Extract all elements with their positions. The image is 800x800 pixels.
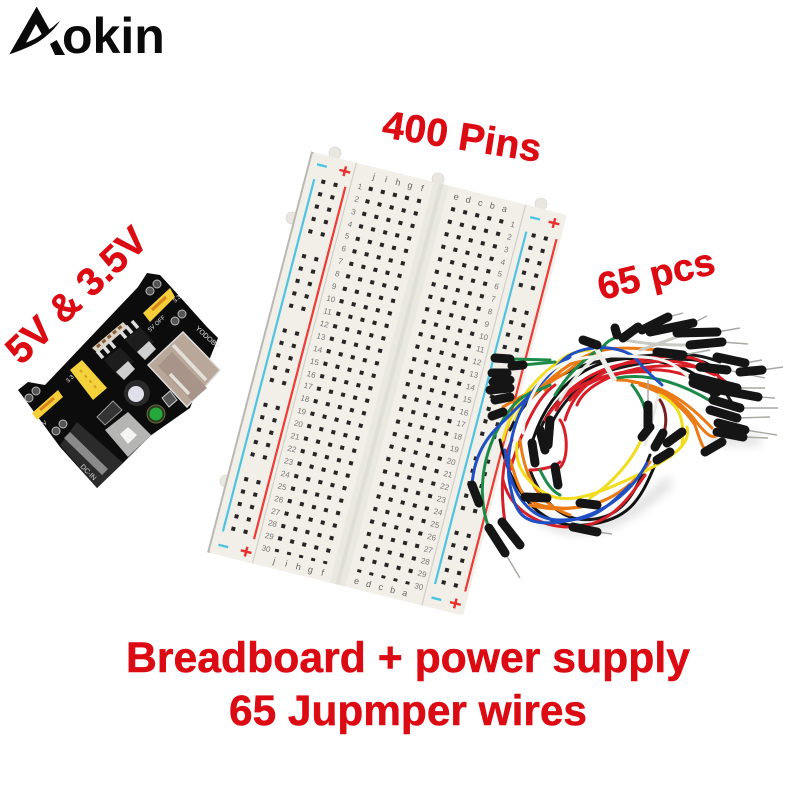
row numbers right: 4	[500, 257, 507, 267]
row numbers right: 29	[417, 569, 428, 580]
row numbers right: 9	[484, 319, 491, 329]
row numbers left: 15	[309, 357, 320, 368]
label: 65 pcs: 65 pcs	[594, 241, 719, 309]
column letters: b	[489, 200, 496, 211]
row numbers right: 22	[439, 482, 451, 493]
PCB	[18, 273, 218, 488]
column letters: j	[271, 555, 277, 566]
breadboard mounting tabs	[220, 147, 547, 487]
logo: Aokin	[9, 7, 165, 64]
jumper wire bundle	[472, 313, 783, 578]
silkscreen labels: 5V	[39, 420, 49, 429]
power supply module	[18, 273, 221, 488]
row numbers right: 15	[462, 394, 473, 405]
row numbers left: 13	[316, 331, 327, 342]
row numbers left: 20	[293, 419, 304, 430]
bundle shadow	[530, 440, 760, 529]
row numbers left: 25	[277, 481, 288, 492]
DC jack	[60, 422, 123, 488]
board body	[207, 152, 314, 553]
column letters: f	[320, 567, 326, 578]
caption line 2: 65 Jupmper wires	[229, 687, 587, 734]
row numbers left: 5	[344, 231, 351, 241]
column letters: f	[420, 183, 425, 194]
column letters: h	[394, 177, 402, 188]
row numbers right: 30	[413, 581, 425, 592]
row numbers right: 5	[497, 269, 504, 279]
row numbers right: 28	[420, 556, 431, 567]
resistor strip	[92, 322, 128, 353]
row numbers right: 21	[442, 469, 454, 480]
column letters: a	[501, 203, 508, 214]
row numbers left: 27	[270, 507, 282, 518]
row numbers left	[261, 181, 366, 554]
column letters: h	[295, 561, 302, 572]
row numbers left: 17	[303, 381, 314, 392]
row numbers left: 4	[347, 220, 354, 230]
power switch	[105, 412, 151, 457]
voltage regulators	[97, 321, 156, 380]
capacitor	[124, 380, 150, 406]
small chip	[97, 401, 122, 425]
rail polarity marks	[217, 159, 561, 610]
column letters: c	[477, 197, 484, 208]
column letters: j	[371, 171, 376, 181]
DC label: DC-IN	[79, 463, 97, 482]
row numbers left: 21	[290, 431, 301, 442]
column letters: g	[307, 564, 314, 575]
icon: logo triangle	[9, 7, 65, 55]
row numbers right: 7	[490, 294, 497, 304]
row numbers right	[413, 219, 519, 592]
row numbers right: 12	[472, 357, 483, 368]
row numbers left: 16	[306, 369, 317, 380]
power rails lines	[223, 179, 557, 591]
row numbers right: 8	[487, 307, 494, 317]
row numbers right: 6	[493, 282, 500, 292]
column letters: e	[453, 191, 460, 202]
centre channel	[330, 182, 449, 586]
row numbers right: 18	[452, 431, 464, 442]
zip tie	[596, 348, 615, 381]
yellow jumper left	[32, 390, 63, 420]
column letters: d	[365, 579, 372, 589]
row numbers left: 18	[299, 393, 311, 404]
row numbers right: 19	[449, 444, 460, 455]
silkscreen labels: 3.3	[65, 374, 76, 384]
small diode	[162, 391, 177, 407]
connector pins	[505, 313, 783, 578]
column letters: d	[465, 194, 472, 205]
row numbers left: 29	[264, 531, 275, 542]
silkscreen labels: 3.3	[172, 294, 183, 304]
caption line 1: Breadboard + power supply	[126, 634, 690, 682]
row numbers left: 19	[296, 406, 308, 417]
row numbers right: 16	[459, 407, 470, 418]
row numbers left: 28	[267, 518, 279, 529]
column letters: b	[389, 585, 397, 595]
row numbers right: 24	[433, 507, 444, 518]
silkscreen labels: 5V OFF	[147, 315, 167, 333]
row numbers right: 17	[455, 419, 467, 430]
row numbers left: 22	[286, 444, 298, 455]
row numbers left: 7	[337, 256, 344, 266]
row numbers right: 13	[468, 369, 480, 380]
row numbers right: 27	[423, 544, 434, 555]
row numbers left: 2	[353, 194, 360, 204]
row numbers right: 25	[429, 519, 441, 530]
row numbers left: 23	[283, 456, 295, 467]
silkscreen labels: YODOBY	[194, 325, 221, 351]
breadboard	[207, 147, 567, 616]
row numbers left: 12	[319, 319, 330, 330]
row numbers right: 2	[506, 232, 513, 242]
row numbers right: 26	[426, 532, 438, 543]
column letters: e	[353, 576, 360, 587]
logo wordmark: okin	[62, 8, 165, 64]
column letters: a	[401, 588, 409, 598]
label: 5V & 3.5V: 5V & 3.5V	[0, 219, 156, 373]
row numbers left: 10	[325, 294, 337, 305]
wires	[472, 333, 738, 528]
row numbers left: 11	[322, 306, 333, 317]
column letters: i	[384, 174, 388, 184]
column letters: i	[284, 559, 289, 569]
column letters	[271, 171, 508, 598]
row numbers left: 1	[357, 182, 364, 192]
yellow pin header	[70, 360, 107, 400]
green LED	[147, 405, 165, 423]
silkscreen labels	[39, 294, 221, 429]
label: 400 Pins: 400 Pins	[380, 103, 544, 171]
rail holes	[232, 180, 547, 589]
row numbers right: 10	[478, 331, 490, 342]
row numbers right: 1	[509, 220, 516, 230]
row numbers left: 8	[334, 269, 341, 279]
mounting holes	[25, 280, 186, 435]
row numbers right: 3	[503, 245, 510, 255]
main holes	[277, 187, 502, 584]
row numbers left: 24	[280, 469, 291, 480]
row numbers right: 23	[436, 494, 447, 505]
row numbers right: 20	[446, 456, 457, 467]
yellow jumper top	[143, 288, 175, 322]
row numbers left: 26	[273, 494, 285, 505]
row numbers left: 30	[261, 543, 272, 554]
row numbers right: 14	[465, 382, 476, 393]
row numbers left: 9	[331, 282, 338, 292]
row numbers left: 14	[312, 344, 324, 355]
column letters: c	[377, 582, 385, 593]
USB socket	[148, 332, 220, 407]
connector housings	[472, 317, 762, 553]
row numbers right: 11	[475, 344, 486, 355]
row numbers left: 3	[350, 207, 357, 217]
row numbers left: 6	[341, 244, 348, 254]
column letters: g	[406, 180, 414, 191]
